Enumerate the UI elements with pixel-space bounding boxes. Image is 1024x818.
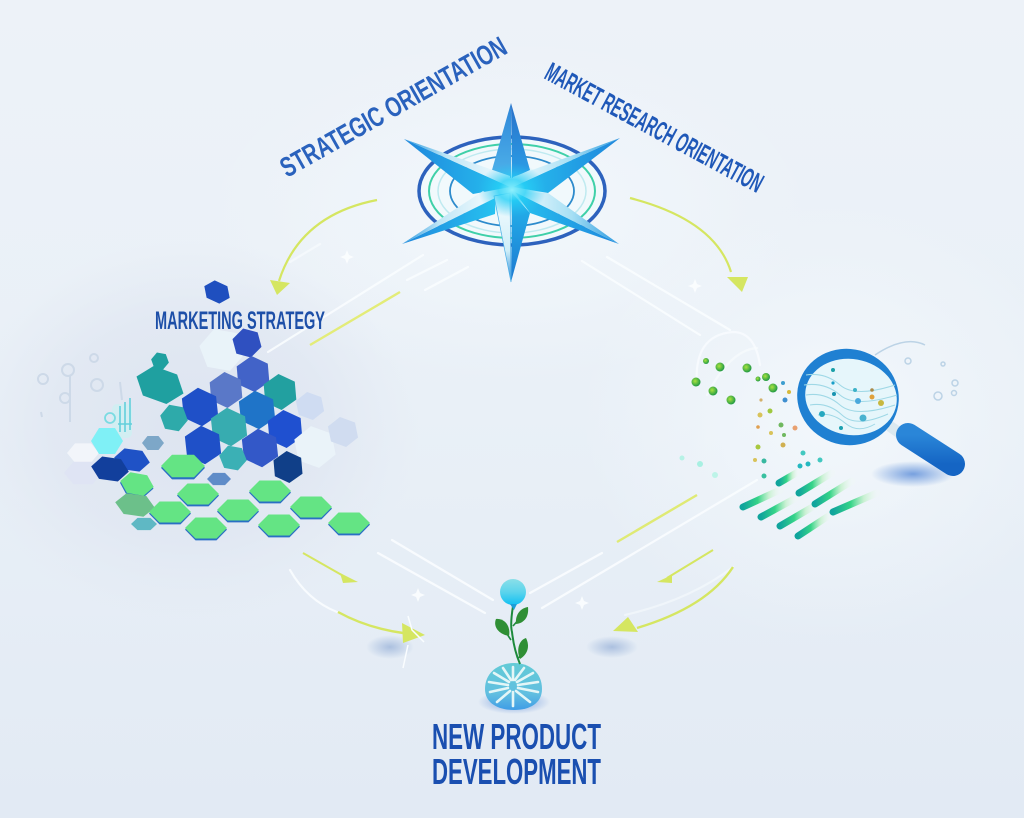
faint marketing doodles [38,354,122,422]
magnifier neck [891,427,901,434]
magnifier lens [786,337,910,457]
arrow: strategic orientation to market research [630,198,748,292]
heading: new product development: DEVELOPMENT [432,751,601,792]
arrow: short marketing strategy to new product [303,553,358,583]
compass rings [419,137,605,245]
arrow: long market research to new product [586,567,733,658]
stem and leaves [495,606,528,664]
heading: market research orientation: MARKET RESEARCH ORIENTATION [540,57,768,198]
heading: new product development [432,716,601,792]
arrow: inner link from market research [617,495,697,542]
icon: market research data and magnifier [680,337,958,536]
hexagons: green base tiles [114,455,370,540]
magnifier handle [908,435,953,464]
sparkles on the guide lines [340,250,702,610]
icon: marketing strategy hexagon cluster [38,277,370,540]
icon: compass star [402,103,620,282]
bulb [478,663,550,714]
multicoloured data specks [680,381,822,478]
pale teal data marks [105,398,132,438]
hexagons: white, blue and teal tiles [64,277,362,486]
magnifier shadow [871,461,955,487]
arrow: long marketing strategy to new product [338,612,425,668]
green data dots [692,358,778,404]
crystal globe [500,579,526,610]
cycle connector: white guide lines [268,244,760,615]
icon: seedling growing from a bulb [478,579,550,714]
compass star blades [402,103,620,282]
heading: new product development: NEW PRODUCT [432,716,601,757]
arrow: inner link from marketing strategy [310,292,400,345]
arrow: short market research to new product [657,550,713,583]
arrow: strategic orientation to marketing strategy [270,200,377,295]
green data streaks [743,472,877,536]
heading: marketing strategy: MARKETING STRATEGY [155,307,325,335]
faint research doodles [875,342,958,400]
